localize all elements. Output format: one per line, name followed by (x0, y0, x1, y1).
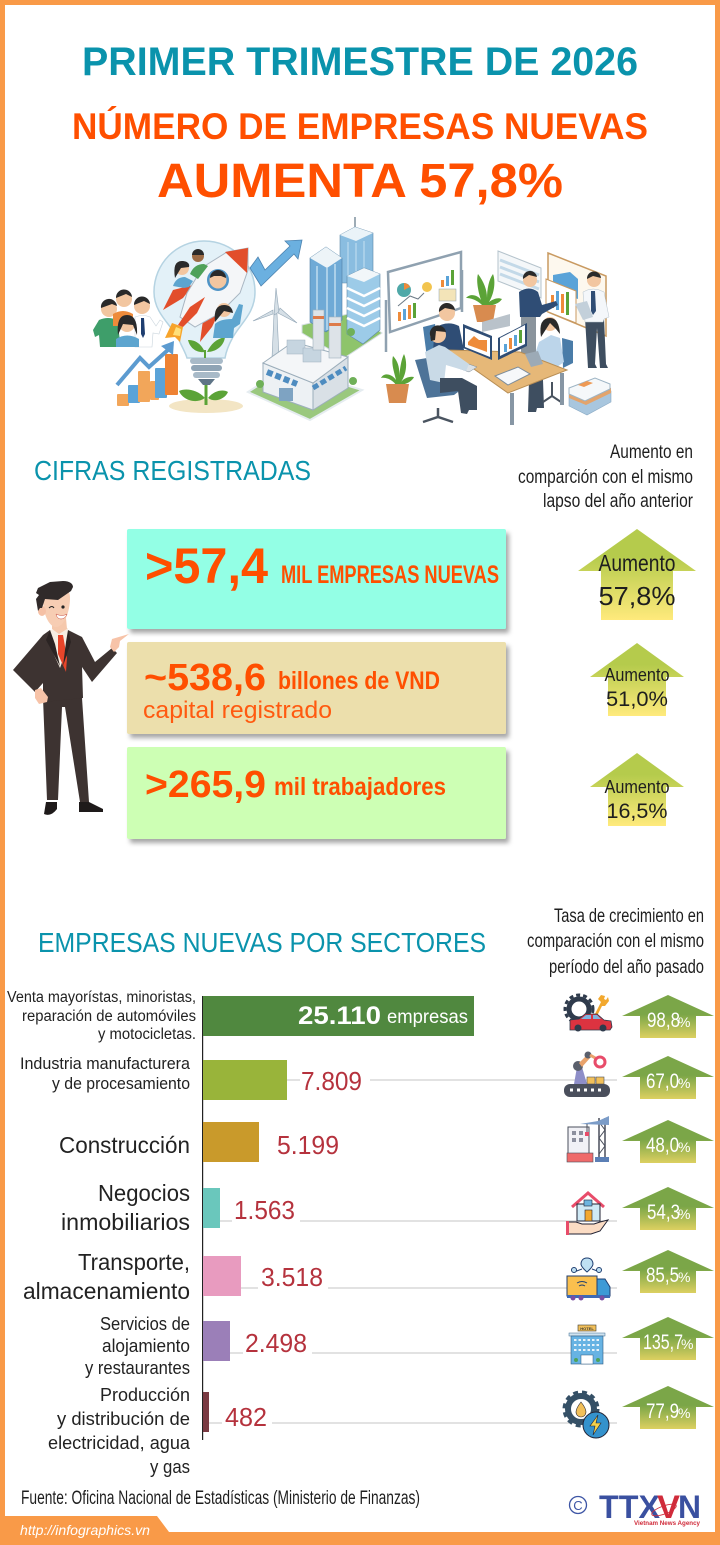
bar: construction: 5.199 (277, 1130, 339, 1160)
bar: accommodation (85, 1314, 307, 1378)
bar: accommodation: Servicios de (100, 1314, 190, 1334)
bar: wholesale and retail: y motocicletas. (98, 1026, 196, 1043)
heading: empresas nuevas por sectores: EMPRESAS NUEVAS POR SECTORES (38, 927, 486, 958)
bar: electricity: y distribución de (57, 1409, 190, 1429)
arrow: 67,0%: 67,0 (646, 1070, 679, 1093)
icon: wind turbine (253, 288, 297, 358)
panel: workers (127, 747, 506, 839)
icon: whiteboard (386, 252, 462, 352)
title (72, 40, 648, 208)
illustration: startup rocket bulb, city, factory, office (93, 217, 611, 425)
bar: wholesale and retail: 25.110 (298, 1002, 381, 1030)
bar: manufacturing: Industria manufacturera (20, 1055, 191, 1073)
bar: accommodation: y restaurantes (85, 1358, 190, 1378)
icon: water and electricity gear (564, 1392, 609, 1438)
arrow: 85,5%: 85,5 (646, 1264, 679, 1287)
icon: stack of reports (569, 378, 611, 415)
panel: new companies: >57,4 (145, 538, 268, 594)
bar: real estate: 1.563 (234, 1195, 295, 1225)
bar: transport (23, 1249, 323, 1304)
arrow: 51,0%: 51,0% (606, 688, 668, 711)
bar: manufacturing (20, 1055, 362, 1100)
bar chart: companies by sector (7, 989, 617, 1477)
panel: registered capital: billones de VND (278, 667, 440, 695)
arrow: 54,3%: 54,3 (647, 1201, 680, 1224)
bar: electricity: y gas (150, 1457, 190, 1477)
panel: registered capital: ~538,6 (144, 657, 266, 699)
icon: hotel (569, 1325, 605, 1364)
panel: workers: >265,9 (145, 764, 266, 806)
icon: standing man blue shirt (519, 271, 558, 360)
bar: electricity: 482 (225, 1402, 267, 1432)
bar: transport: almacenamiento (23, 1278, 190, 1304)
logo: TTXVN: V (657, 1489, 681, 1525)
logo: TTXVN: C (573, 1498, 583, 1513)
arrow: 54,3%: % (678, 1206, 690, 1222)
bar: wholesale and retail: Venta mayorístas, minoristas, (7, 989, 196, 1006)
bar: electricity (48, 1385, 267, 1477)
arrow: 77,9%: % (678, 1405, 690, 1421)
arrow: 57,8% (578, 529, 696, 620)
icon: house in hand (566, 1193, 608, 1235)
bar: accommodation: alojamiento (102, 1336, 190, 1356)
arrow: 57,8%: Aumento (598, 550, 676, 576)
icon: growth bars and arrow (117, 341, 178, 406)
icon: robotic arm conveyor (564, 1052, 610, 1097)
bar: wholesale and retail (7, 989, 474, 1043)
arrow: 57,8%: 57,8% (598, 581, 676, 611)
bar: accommodation: 2.498 (245, 1328, 307, 1358)
arrow: 16,5%: Aumento (604, 777, 670, 797)
bar: manufacturing: y de procesamiento (52, 1075, 190, 1093)
panel: registered capital (127, 642, 506, 734)
logo: TTXVN: Vietnam News Agency (634, 1520, 700, 1527)
bar: construction: Construcción (59, 1132, 190, 1158)
title: PRIMER TRIMESTRE DE 2026 (82, 40, 638, 84)
comparison note: Aumento en (610, 442, 693, 463)
icon: wall charts (498, 251, 606, 336)
bar: wholesale and retail: empresas (387, 1007, 468, 1028)
arrow: 77,9%: 77,9 (646, 1400, 679, 1423)
icon: skyscrapers (302, 217, 382, 358)
icon: smart delivery truck (567, 1258, 610, 1300)
arrow: 54,3% (622, 1187, 714, 1230)
bar: real estate: Negocios (98, 1180, 190, 1206)
icon: car repair (565, 995, 612, 1032)
panel: workers: mil trabajadores (274, 773, 446, 801)
bar: manufacturing: 7.809 (301, 1066, 362, 1096)
panel: new companies (127, 529, 506, 629)
arrow: 98,8%: % (678, 1014, 690, 1030)
panel: new companies: MIL EMPRESAS NUEVAS (281, 561, 499, 589)
bar: real estate: inmobiliarios (61, 1209, 190, 1235)
arrow: 135,7%: % (681, 1336, 693, 1352)
logo: TTXVN: TTX (599, 1489, 661, 1525)
arrow: 98,8% (622, 995, 714, 1038)
icon: rising arrow (250, 240, 302, 286)
growth arrows by sector (622, 995, 714, 1429)
arrow: 67,0% (622, 1056, 714, 1099)
panel: registered capital: capital registrado (143, 697, 332, 724)
icon: construction crane and building (567, 1116, 609, 1162)
title: NÚMERO DE EMPRESAS NUEVAS (72, 105, 648, 147)
icon: businessman pointing (13, 581, 129, 815)
icon: office desk with team (415, 303, 573, 425)
logo: TTXVN: N (678, 1489, 701, 1525)
bar: transport: Transporte, (78, 1249, 190, 1275)
arrow: 16,5%: 16,5% (606, 800, 668, 823)
bar: electricity: electricidad, agua (48, 1433, 191, 1453)
arrow: 98,8%: 98,8 (647, 1009, 680, 1032)
bar: electricity: Producción (100, 1385, 190, 1405)
arrow: 51,0%: Aumento (604, 665, 670, 685)
icon: light bulb with rocket (154, 241, 255, 413)
source: Fuente: Oficina Nacional de Estadísticas (Ministerio de Finanzas) (21, 1488, 420, 1509)
icon: team of people (93, 289, 163, 347)
footer url: http://infographics.vn (20, 1522, 150, 1538)
arrow: 85,5% (622, 1250, 714, 1293)
arrow: 77,9% (622, 1386, 714, 1429)
arrow: 48,0% (622, 1120, 714, 1163)
growth rate note (527, 906, 704, 978)
arrow: 67,0%: % (678, 1075, 690, 1091)
heading: cifras registradas: CIFRAS REGISTRADAS (34, 455, 311, 486)
arrow: 48,0%: % (678, 1139, 690, 1155)
icon: standing man with clipboard (575, 271, 609, 368)
title: AUMENTA 57,8% (157, 155, 563, 208)
bar: real estate (61, 1180, 295, 1235)
bar: construction (59, 1122, 339, 1162)
comparison note (518, 442, 694, 512)
icon: hotel: HOTEL (580, 1326, 594, 1331)
bar: transport: 3.518 (261, 1262, 323, 1292)
arrow: 85,5%: % (678, 1269, 690, 1285)
logo: TTXVN (570, 1489, 701, 1527)
arrow: 48,0%: 48,0 (646, 1134, 679, 1157)
bar: wholesale and retail: reparación de automóviles (22, 1008, 196, 1025)
arrow: 16,5% (590, 753, 684, 826)
icon: potted plants (381, 274, 502, 403)
icon: factory (248, 310, 362, 420)
arrow: 135,7% (622, 1317, 714, 1360)
arrow: 135,7%: 135,7 (643, 1331, 683, 1354)
arrow: 51,0% (590, 643, 684, 716)
